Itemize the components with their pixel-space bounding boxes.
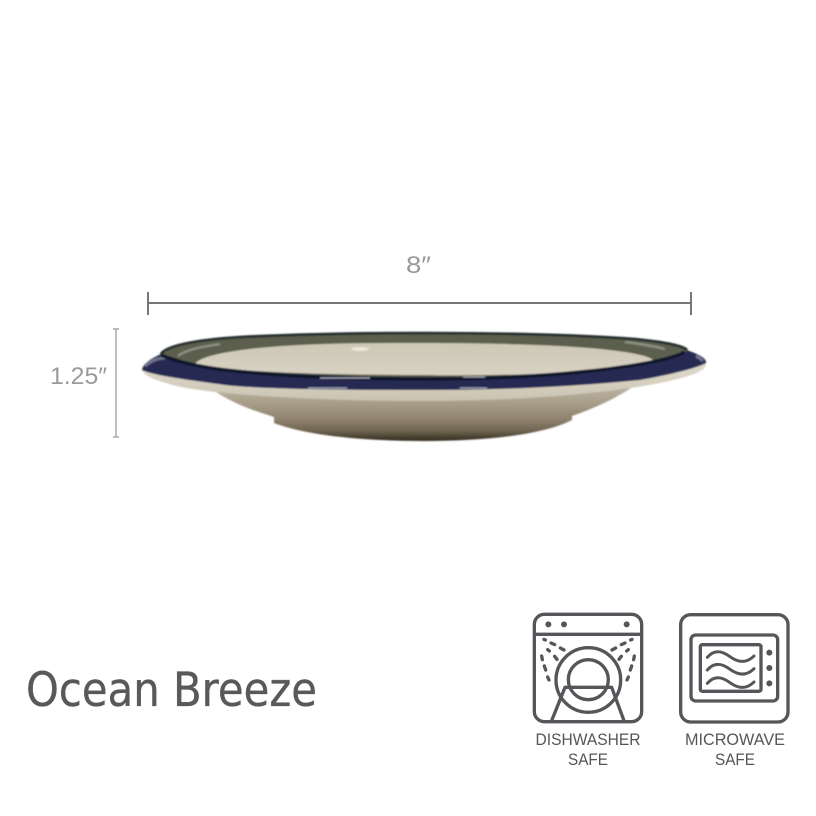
blue band tip shading [145, 356, 703, 366]
height arrow [113, 329, 119, 437]
cream outer rim [142, 362, 706, 401]
width label: 8″ [406, 252, 432, 279]
label: dishwasher safe [536, 731, 641, 769]
dishwasher body [534, 614, 642, 722]
height dimension [50, 329, 119, 437]
water spray [542, 639, 634, 680]
microwave body [691, 635, 778, 701]
plate underside [216, 386, 634, 441]
width dimension [148, 252, 691, 315]
blue rim band [142, 349, 706, 390]
dish rack [552, 687, 624, 721]
label: dishwasher safe: DISHWASHER [536, 731, 641, 749]
heat waves [707, 652, 754, 687]
rim ridge highlight [178, 342, 665, 356]
well highlight [351, 347, 369, 351]
inner rim green band [160, 333, 687, 377]
plate [556, 648, 621, 712]
control dots [545, 621, 630, 627]
control dots [766, 650, 772, 686]
label: dishwasher safe: SAFE [568, 751, 608, 769]
dark upper rim line [161, 333, 687, 354]
title: Ocean Breeze [26, 663, 317, 718]
outer frame [681, 615, 788, 722]
control panel line [534, 629, 642, 639]
width arrow [148, 292, 691, 315]
height label: 1.25″ [50, 363, 108, 390]
label: microwave safe: SAFE [715, 751, 755, 769]
dark lower rim line [161, 352, 685, 379]
icon: dishwasher safe [534, 614, 642, 722]
label: microwave safe: MICROWAVE [685, 731, 785, 749]
rim highlights [308, 377, 487, 388]
plate photo [142, 333, 706, 441]
label: microwave safe [685, 731, 785, 769]
plate well [195, 343, 653, 375]
microwave door [700, 645, 761, 691]
icon: microwave safe [681, 615, 788, 722]
